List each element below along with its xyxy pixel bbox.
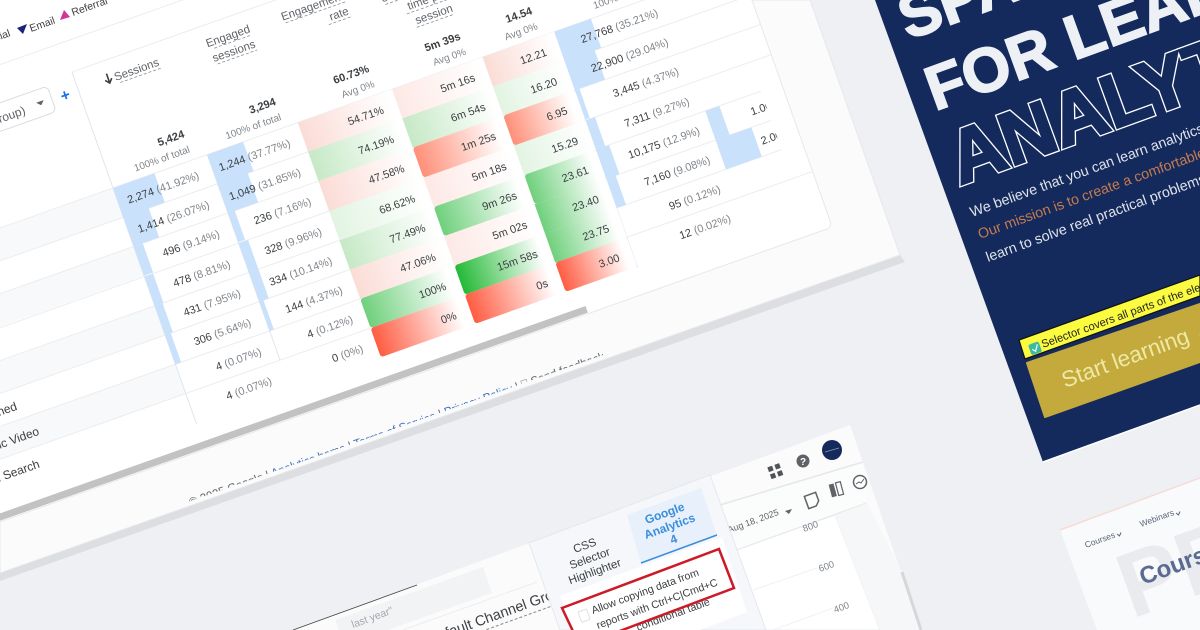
engagement rate values: 54.71% [346, 104, 386, 128]
panel: analytics report table [0, 0, 905, 598]
panel: courses page [1060, 478, 1200, 630]
navigation: Courses [1083, 530, 1116, 550]
checkbox outline [578, 609, 590, 622]
table card [0, 0, 884, 549]
engagement rate values: 77.49% [388, 222, 427, 246]
column headers: session [414, 3, 455, 27]
heatmap: engagement rate [298, 89, 475, 357]
tab: inactive: CSS [572, 536, 598, 556]
engaged sessions values: 144 (4.37%) [284, 285, 344, 316]
data bars: engaged sessions [207, 142, 306, 331]
header totals: 100% of total [133, 145, 191, 174]
icon: columns [829, 482, 844, 497]
sessions values: 306 (5.64%) [192, 317, 253, 348]
engaged sessions values: 334 (10.14%) [268, 255, 334, 289]
chart card: 600 [817, 559, 836, 575]
options card [560, 537, 747, 630]
sessions values: 2,274 (41.92%) [126, 170, 201, 206]
chart card: 800 [801, 519, 820, 535]
data bars: last column [653, 0, 781, 169]
divider under search [403, 582, 537, 630]
scrollbar edge [902, 572, 921, 630]
engaged sessions values: 4 (0.12%) [306, 314, 355, 341]
chart legend [0, 0, 109, 48]
tab: active: Analytics [642, 510, 697, 542]
header totals [127, 0, 651, 174]
total users values: 3,445 (4.37%) [611, 66, 681, 100]
average engagement time values [433, 72, 550, 303]
sessions per user values: 16.20 [529, 76, 559, 97]
column headers: Engaged [204, 24, 252, 50]
sessions values: 4 (0.07%) [225, 375, 274, 403]
navigation [1083, 507, 1180, 550]
tab: inactive: Highlighter [567, 557, 623, 587]
sessions per user values: 3.00 [597, 252, 621, 271]
sessions values [126, 170, 274, 412]
sessions per user values: 23.40 [571, 194, 601, 214]
average engagement time values: 5m 18s [470, 161, 509, 184]
header totals: 60.73% [332, 63, 371, 87]
average engagement time values: 6m 54s [449, 101, 488, 125]
average engagement time values: 1m 25s [460, 130, 498, 154]
channel selector [0, 80, 74, 169]
sessions values: 431 (7.95%) [182, 288, 243, 319]
engaged sessions values: 1,244 (37.77%) [217, 138, 292, 174]
last column values [744, 79, 802, 158]
icon: notes [804, 492, 820, 509]
icon: avatar [822, 440, 842, 460]
header totals: 5,424 [156, 128, 187, 149]
date range: Aug 18, 2025 [726, 507, 780, 535]
search box [335, 567, 492, 630]
column headers: Sessions [113, 57, 161, 84]
icon: help [796, 454, 810, 468]
tab: inactive: Selector [568, 546, 612, 572]
red highlight box [562, 549, 734, 630]
row labels [0, 395, 52, 492]
header totals: Avg 0% [432, 47, 468, 69]
engagement rate values: 100% [417, 281, 448, 302]
sessions values: 4 (0.07%) [214, 346, 263, 374]
engagement rate values: 0% [439, 310, 459, 327]
sessions per user values: 12.21 [519, 47, 549, 67]
sessions per user values: 6.95 [545, 105, 569, 124]
header totals: Avg 0% [503, 21, 539, 43]
option text: Allow copying data from [590, 567, 701, 617]
chart card [737, 503, 920, 630]
column headers [103, 0, 455, 131]
panel: promo poster [875, 0, 1200, 462]
paragraph: We believe that you can learn analytics [968, 121, 1200, 221]
total users values: 95 (0.12%) [668, 184, 722, 213]
navigation: Webinars [1138, 507, 1175, 529]
header totals: Avg 0% [340, 79, 376, 101]
engagement rate values: 47.06% [398, 252, 438, 275]
data bars: total users [554, 19, 653, 208]
column headers: rate [328, 6, 351, 24]
icon: apps grid [767, 463, 783, 479]
data bars: sessions [113, 173, 217, 364]
chart legend: Email [28, 15, 57, 35]
last column values: 2.00 [759, 129, 784, 148]
average engagement time values: 15m 58s [496, 248, 540, 274]
header totals: 14.54 [504, 5, 535, 26]
chart card: 400 [832, 600, 851, 616]
sessions values: 1,414 (26.07%) [136, 199, 211, 236]
average engagement time values: 5m 02s [491, 219, 530, 243]
sessions per user values [519, 47, 621, 273]
tab: active: Google [643, 499, 687, 527]
heatmap: sessions per user [483, 32, 637, 292]
total users values: 27,768 (35.21%) [579, 7, 660, 46]
header totals: 100% of total [224, 112, 283, 142]
engaged sessions values [217, 138, 365, 380]
total users values: 12 (0.02%) [678, 213, 733, 242]
engagement rate values: 68.62% [378, 193, 417, 217]
tab: active: 4 [668, 531, 679, 547]
total users values: 7,311 (9.27%) [623, 96, 691, 130]
sessions values: 496 (9.14%) [161, 228, 221, 260]
average engagement time values: 5m 16s [439, 72, 477, 96]
channel selector: + [58, 86, 73, 106]
sessions per user values: 15.29 [550, 135, 580, 156]
column headers: sessions [211, 39, 257, 65]
engagement rate values: 47.58% [367, 163, 406, 187]
engaged sessions values: 236 (7.16%) [252, 196, 313, 227]
heatmap: average engagement time [392, 57, 566, 324]
total users values: 22,900 (29.04%) [590, 37, 670, 75]
total users values: 10,175 (12.9%) [627, 125, 702, 162]
last column values: 1.00 [749, 100, 773, 118]
sessions values: 478 (8.81%) [172, 259, 232, 290]
engaged sessions values: 1,049 (31.85%) [228, 167, 303, 203]
toolbar band [720, 462, 867, 550]
header totals: 3,294 [248, 96, 278, 117]
tab: active [627, 488, 717, 563]
engagement rate values: 74.19% [357, 134, 396, 158]
total users values [579, 7, 733, 251]
panel: extension popup [529, 475, 766, 630]
engagement rate values [346, 104, 459, 334]
average engagement time values: 0s [535, 278, 550, 293]
average engagement time values: 9m 26s [481, 190, 519, 213]
icon: dropdown arrow [785, 509, 792, 514]
engaged sessions values: 328 (9.96%) [263, 226, 324, 258]
button [1027, 304, 1200, 417]
icon: help: ? [800, 457, 806, 468]
paragraph [968, 121, 1200, 266]
engaged sessions values: 0 (0%) [330, 343, 365, 365]
total users values: 7,160 (9.08%) [643, 154, 712, 189]
icon: insights [854, 476, 866, 488]
header totals: 5m 39s [423, 31, 462, 54]
footer links: © 2025 Google | Analytics home | Terms of Service | Privacy Policy | ⎕ Send feedback [187, 350, 606, 509]
panel: reports page with chart [293, 425, 921, 630]
tab: inactive [567, 536, 623, 587]
sessions per user values: 23.75 [581, 223, 611, 244]
scrollbar [0, 306, 588, 548]
sessions per user values: 23.61 [560, 165, 590, 185]
